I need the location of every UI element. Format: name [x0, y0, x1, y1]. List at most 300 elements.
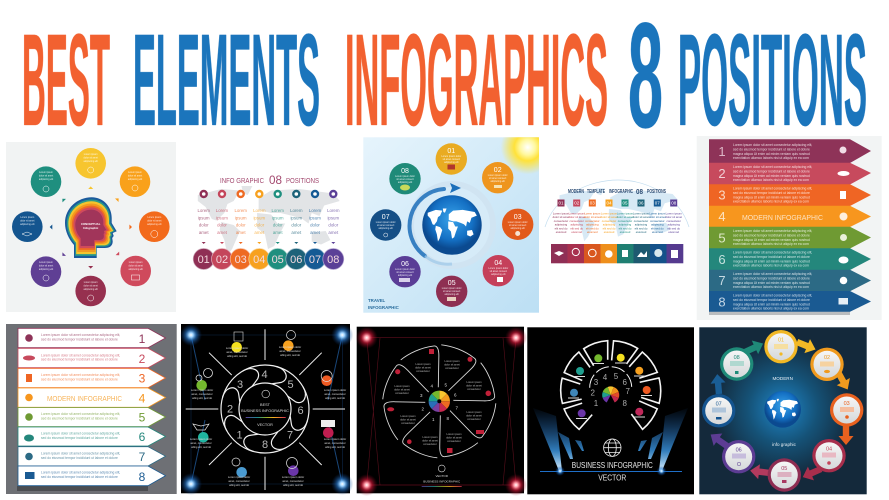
circle 01: Lorem ipsum dolor: [441, 155, 461, 158]
colored dots with icons and captions: Lorem ipsum dolor: [191, 388, 213, 392]
colored dots with icons and captions: [190, 330, 346, 487]
center label: BEST: [260, 403, 271, 407]
colored dots with icons and captions: uding elit, sed do: [227, 354, 248, 358]
world map backdrop: [198, 186, 340, 255]
text columns: dolor sit amet: [553, 215, 570, 219]
text columns: dolor: [236, 223, 246, 228]
text columns: eiusmod: [571, 230, 582, 234]
petal captions: Lorem ipsum: [444, 359, 460, 363]
head graphic: CONCEPTUAL: [81, 222, 101, 226]
circle 05: [436, 276, 467, 307]
text columns: dolor: [217, 223, 227, 228]
step 02: 02: [824, 355, 830, 361]
arrow 8: 8: [139, 470, 146, 484]
numbered squares: 08: [671, 201, 677, 206]
arrow 2: exercitation ullamco laboris nisi ut aliquip ex ea com: [733, 178, 809, 182]
arrow 6: Lorem ipsum dolor sit amet consectetur adipiscing elit,: [733, 250, 812, 254]
title: ELEMENTS: [133, 6, 320, 153]
arrow 1: Lorem ipsum dolor sit amet consectetur adipiscing elit,: [41, 333, 120, 337]
circle 05: sit amet consect: [443, 290, 461, 293]
ring numbers: 1: [236, 430, 243, 442]
colored dots with icons and captions: Lorem ipsum dolor: [226, 346, 248, 350]
arrow 6: magna aliqua Ut enim ad minim veniam quis nostrud: [733, 259, 810, 263]
arrow 7: exercitation ullamco laboris nisi ut aliquip ex ea com: [733, 285, 809, 289]
arch segments: [555, 334, 667, 432]
circle 3 deep orange: Lorem ipsum: [147, 216, 161, 219]
arrow 7: 7: [718, 273, 726, 288]
center labels: info graphic: [772, 442, 797, 447]
text columns: ipsum: [253, 215, 265, 220]
petals: [370, 332, 509, 471]
circle 7 blue: [12, 211, 43, 242]
numbered circles: 05: [272, 254, 284, 266]
circle 2 orange: Lorem ipsum: [128, 171, 142, 174]
numbered circles: [193, 248, 344, 270]
petal numbers: 5: [444, 382, 447, 388]
arrow 3: sed do eiusmod tempor incididunt ut labore et dolore: [41, 377, 118, 381]
step 01: 01: [778, 338, 784, 344]
text columns: elit sed do: [667, 226, 681, 230]
text columns: amet: [254, 230, 265, 235]
arch numbers: 6: [622, 378, 627, 387]
text columns: dolor sit amet: [633, 215, 650, 219]
petal captions: consectetur: [447, 439, 461, 443]
arrow 6: exercitation ullamco laboris nisi ut aliquip ex ea com: [733, 264, 809, 268]
text columns: eiusmod: [604, 230, 615, 234]
center labels: [772, 376, 797, 447]
text columns: Lorem: [271, 208, 284, 213]
text columns: ipsum: [216, 215, 228, 220]
text columns: Lorem ipsum: [553, 212, 570, 216]
arrow 1: magna aliqua Ut enim ad minim veniam quis nostrud: [733, 152, 810, 156]
text columns: consectetur: [634, 219, 648, 223]
numbered circles: 06: [290, 254, 302, 266]
circle 02: [482, 162, 513, 193]
petal captions: dolor sit amet: [466, 414, 482, 418]
colored dots with icons and captions: amet, consectetur: [279, 349, 301, 353]
circle 2 orange: adipiscing elit: [128, 178, 143, 181]
petal numbers: 2: [421, 406, 424, 412]
double ring with curls: [221, 365, 309, 453]
arrow 3: [709, 184, 871, 206]
panel: travel infographic: [363, 137, 539, 313]
step 05: [768, 458, 801, 492]
colored dots with icons and captions: uding elit, sed do: [325, 445, 346, 449]
text columns: consectetur: [650, 219, 665, 223]
circle 03: adipiscing elit: [511, 227, 525, 230]
circle 08: sit amet consect: [396, 178, 414, 181]
petal captions: dolor sit amet: [444, 362, 460, 366]
text columns: Lorem ipsum: [666, 212, 682, 216]
arrow 8: Lorem ipsum dolor sit amet consectetur adipiscing elit,: [41, 470, 120, 474]
colored dots with icons and captions: uding elit, sed do: [229, 483, 250, 487]
arrow 6: [18, 427, 166, 446]
numbered squares: 02: [574, 201, 580, 206]
arrow 6: 6: [718, 252, 726, 267]
arrow 3: exercitation ullamco laboris nisi ut aliquip ex ea com: [733, 200, 809, 204]
text columns: Lorem: [309, 208, 322, 213]
arrow 5: magna aliqua Ut enim ad minim veniam quis nostrud: [733, 238, 810, 242]
arrow 3: Lorem ipsum dolor sit amet consectetur adipiscing elit,: [41, 373, 120, 377]
ring numbers: 7: [287, 430, 293, 442]
circle 3 deep orange: dolor sit amet: [147, 220, 162, 222]
colored dots with icons and captions: Lorem ipsum dolor: [324, 388, 346, 392]
arrow 7: Lorem ipsum dolor sit amet consectetur adipiscing elit,: [733, 272, 812, 276]
text columns: amet: [236, 230, 246, 235]
arrow 3: 3: [139, 372, 146, 386]
numbered circles: 02: [216, 254, 228, 266]
ring numbers: 2: [227, 404, 233, 416]
petal captions: consectetur: [395, 391, 409, 395]
head graphic: [65, 197, 117, 258]
circle 04: [483, 255, 514, 286]
petal numbers: 3: [420, 393, 423, 398]
arrow 5: Lorem ipsum dolor sit amet consectetur adipiscing elit,: [733, 229, 812, 233]
arrow 8: sed do eiusmod tempor incididunt ut labore et dolore: [41, 475, 118, 479]
step 08: [720, 347, 753, 381]
text columns: adipiscing: [635, 223, 648, 227]
text columns: elit sed do: [570, 226, 584, 230]
arch numbers: 8: [622, 399, 627, 408]
circle 08: [389, 163, 421, 194]
text columns: elit sed do: [555, 226, 568, 230]
text columns: Lorem ipsum: [569, 212, 585, 216]
text columns: Lorem: [327, 208, 340, 213]
circle 1 yellow: Lorem ipsum: [84, 153, 98, 156]
circle 01: 01: [447, 148, 455, 155]
halo and swoosh arc: [410, 184, 493, 266]
colored dots with icons and captions: amet, consectetur: [324, 392, 346, 396]
numbered circles: 04: [253, 254, 265, 266]
arrow 5: exercitation ullamco laboris nisi ut aliquip ex ea com: [733, 242, 809, 246]
text columns: adipiscing: [667, 223, 680, 227]
spokes: [186, 329, 345, 490]
icon row: [200, 190, 337, 198]
arrow 2: Lorem ipsum dolor sit amet consectetur adipiscing elit,: [41, 353, 120, 357]
text columns: dolor sit amet: [568, 215, 585, 219]
ring numbers: 6: [297, 405, 304, 417]
text columns: ipsum: [309, 215, 321, 220]
arrow 4: 4: [139, 392, 146, 406]
text columns: Lorem: [234, 208, 247, 213]
petal numbers: 1: [432, 417, 435, 422]
text columns: consectetur: [618, 219, 632, 223]
colored dots with icons and captions: uding elit, sed do: [192, 396, 213, 400]
arch and map: [545, 180, 689, 241]
colored dots with icons and captions: uding elit, sed do: [283, 483, 304, 487]
text columns: eiusmod: [652, 230, 663, 234]
circle 7 blue: adipiscing elit: [20, 223, 35, 226]
globe: [422, 195, 482, 255]
travel label: [368, 298, 400, 310]
arrow 4: MODERN INFOGRAPHIC: [742, 213, 824, 222]
text columns: Lorem: [216, 208, 229, 213]
arrow 1: Lorem ipsum dolor sit amet consectetur adipiscing elit,: [733, 143, 812, 147]
arrow 3: Lorem ipsum dolor sit amet consectetur adipiscing elit,: [733, 186, 812, 190]
colored dots with captions: [568, 354, 652, 419]
petal captions: Lorem ipsum: [466, 380, 482, 384]
text columns: dolor sit amet: [617, 215, 634, 219]
arch numbers: 7: [625, 387, 630, 396]
petal numbers: 7: [455, 406, 458, 410]
circle 5 maroon: adipiscing elit: [84, 288, 98, 291]
text columns: consectetur: [569, 219, 584, 223]
arrow 2: sed do eiusmod tempor incididunt ut labore et dolore: [733, 169, 810, 173]
arrow 5: 5: [718, 230, 726, 246]
arrow 7: magna aliqua Ut enim ad minim veniam quis nostrud: [733, 281, 810, 285]
circle 7 blue: Lorem ipsum: [20, 216, 34, 219]
circle 7 blue: dolor sit amet: [20, 220, 35, 222]
arrow 5: 5: [139, 410, 146, 424]
circle 06: Lorem ipsum dolor: [395, 268, 415, 271]
ring numbers: 8: [262, 439, 268, 451]
circle 1 yellow: dolor sit amet: [84, 156, 98, 160]
bottom label: BUSINESS INFOGRAPHIC: [423, 480, 461, 484]
arrow 8: Lorem ipsum dolor sit amet consectetur adipiscing elit,: [733, 294, 812, 298]
text columns: Lorem ipsum: [633, 212, 650, 216]
color wheel: [429, 391, 450, 412]
text columns: Lorem: [197, 208, 210, 213]
bottom label: [422, 465, 462, 487]
text columns: adipiscing: [603, 223, 616, 227]
circle 01: [436, 143, 467, 175]
arrow 7: sed do eiusmod tempor incididunt ut labore et dolore: [41, 456, 118, 460]
text columns: consectetur: [666, 219, 681, 223]
arrow 7: Lorem ipsum dolor sit amet consectetur adipiscing elit,: [41, 452, 120, 456]
text columns: amet: [291, 230, 302, 235]
arch numbers: 2: [590, 388, 595, 398]
text columns: amet: [199, 230, 209, 235]
circle 04: 04: [494, 260, 502, 267]
text columns: Lorem ipsum: [584, 212, 601, 216]
panel heading: TEMPLATE: [587, 189, 605, 195]
circle 2 orange: [120, 166, 150, 197]
numbered squares: 06: [638, 201, 644, 206]
arrow 3: 3: [718, 188, 726, 202]
petal numbers: 6: [454, 392, 457, 398]
text columns: elit sed do: [586, 226, 599, 230]
circle 1 yellow: adipiscing elit: [84, 160, 98, 163]
circle 07: [370, 209, 401, 241]
circle 08: 08: [401, 168, 409, 175]
arrow 2: 2: [718, 166, 726, 181]
panel heading: MODERN: [568, 189, 584, 195]
center label: VECTOR: [257, 423, 273, 427]
ring numbers: 4: [261, 369, 268, 381]
text columns: elit sed do: [651, 226, 664, 230]
circle 02: adipiscing elit: [491, 180, 505, 183]
text columns: Lorem ipsum: [601, 212, 618, 216]
text columns: amet: [273, 230, 283, 235]
petal captions: dolor sit amet: [400, 418, 416, 422]
step 04: 04: [826, 446, 832, 452]
text columns: amet: [310, 230, 321, 235]
arrow 1: [18, 328, 166, 348]
step 07: 07: [716, 402, 722, 408]
arrow 7: [709, 270, 871, 291]
center labels: MODERN: [772, 376, 793, 381]
text columns: adipiscing: [619, 223, 632, 227]
arrow 8: [709, 291, 871, 312]
arrow 5: [709, 227, 871, 248]
circle 06: adipiscing elit: [398, 274, 413, 277]
arrow 8: [18, 466, 166, 486]
circle 05: 05: [448, 280, 456, 287]
ring numbers: [227, 369, 304, 451]
circle 6 purple: adipiscing elit: [39, 268, 54, 271]
arrow 2: [709, 163, 871, 184]
arrow 7: 7: [139, 450, 146, 464]
circle 8 teal: [31, 166, 61, 197]
text columns: Lorem ipsum: [617, 212, 634, 216]
arrow 6: sed do eiusmod tempor incididunt ut labore et dolore: [41, 436, 118, 440]
plane icon: [450, 183, 461, 193]
arrow 1: [709, 139, 871, 163]
colored dots with icons and captions: amet, consectetur: [228, 479, 250, 483]
panel heading: INFO GRAPHIC: [220, 178, 264, 185]
head graphic: Infographic: [83, 226, 99, 230]
arrow 4: MODERN INFOGRAPHIC: [47, 394, 122, 403]
text columns: dolor: [310, 223, 320, 228]
colored dots with icons and captions: amet, consectetur: [190, 441, 212, 445]
panel: black petals red flares: [356, 327, 527, 496]
arrow 8: 8: [718, 294, 726, 310]
numbered squares: 07: [655, 201, 660, 206]
text columns: [553, 212, 682, 234]
petal captions: Lorem ipsum: [446, 432, 462, 436]
red petal icons: [387, 349, 491, 453]
colored dots with icons and captions: Lorem ipsum dolor: [190, 437, 212, 441]
text columns: consectetur: [602, 219, 616, 223]
petal captions: dolor sit amet: [415, 366, 431, 370]
connector arrows: [706, 335, 854, 484]
circle 08: adipiscing elit: [398, 181, 413, 184]
arrow 4: [18, 388, 166, 407]
business infographic label: BUSINESS INFOGRAPHIC: [572, 461, 653, 470]
arrow 8: exercitation ullamco laboris nisi ut aliquip ex ea com: [733, 307, 809, 311]
circle 02: Lorem ipsum dolor: [488, 174, 508, 177]
petal numbers: 4: [430, 384, 433, 388]
panel heading: POSITIONS: [286, 178, 319, 185]
circle 3 deep orange: adipiscing elit: [147, 223, 162, 226]
arrow 6: sed do eiusmod tempor incididunt ut labore et dolore: [733, 255, 810, 259]
circle 2 orange: dolor sit amet: [128, 174, 143, 178]
circle 3 deep orange: [139, 211, 170, 242]
colored dots with icons and captions: Lorem ipsum dolor: [279, 345, 301, 349]
text columns: consectetur: [554, 219, 568, 223]
arch numbers: 4: [603, 373, 608, 382]
panel: info graphic 08 positions: [193, 173, 344, 270]
step 03: [830, 393, 863, 427]
center label: [241, 390, 289, 427]
petal captions: consectetur: [445, 366, 459, 370]
business infographic label: [572, 461, 653, 482]
text columns: dolor: [273, 223, 283, 228]
text columns: consectetur: [585, 219, 600, 223]
petal captions: [394, 359, 482, 446]
panel: head cycle: [6, 142, 176, 312]
arrow 2: 2: [139, 352, 146, 366]
numbered circles: 08: [327, 254, 339, 266]
circle 8 teal: adipiscing elit: [39, 178, 54, 181]
travel label: INFOGRAPHIC: [368, 305, 400, 310]
arrow 1: exercitation ullamco laboris nisi ut aliquip ex ea com: [733, 156, 809, 160]
panel heading: POSITIONS: [647, 189, 666, 195]
arrow 4: [709, 206, 871, 227]
circle 01: adipiscing elit: [444, 161, 459, 164]
petal captions: Lorem ipsum: [400, 414, 416, 418]
circle 4 red: dolor sit amet: [129, 264, 143, 268]
circle 8 teal: dolor sit amet: [39, 174, 54, 178]
petal captions: consectetur: [401, 421, 415, 425]
arrow 5: sed do eiusmod tempor incididunt ut labore et dolore: [733, 233, 810, 237]
step 06: 06: [736, 448, 742, 454]
text columns: Lorem: [253, 208, 266, 213]
center label: BUSINESS INFOGRAPHIC: [241, 408, 289, 413]
pointer triangles: [202, 242, 335, 244]
circle 02: 02: [494, 167, 502, 174]
panel: modern template infographic: [545, 180, 689, 263]
circle 6 purple: dolor sit amet: [39, 264, 54, 268]
small direction arrows: [50, 186, 132, 269]
arrow 4: 4: [718, 209, 726, 224]
circle 1 yellow: [75, 148, 106, 179]
circle 5 maroon: Lorem ipsum: [84, 281, 98, 284]
step 07: [702, 394, 735, 427]
colored dots with icons and captions: amet, consectetur: [226, 350, 248, 354]
circle 07: adipiscing elit: [379, 227, 393, 230]
arrow 3: sed do eiusmod tempor incididunt ut labore et dolore: [733, 191, 810, 195]
text columns: adipiscing: [651, 223, 664, 227]
text columns: dolor sit amet: [584, 215, 601, 219]
text columns: adipiscing: [586, 223, 599, 227]
red corner flares: [356, 327, 527, 496]
colored dots with icons and captions: uding elit, sed do: [280, 353, 301, 357]
arch numbers: 1: [594, 399, 599, 408]
ring numbers: 5: [287, 379, 294, 391]
arch numbers: [590, 372, 630, 408]
text columns: ipsum: [198, 215, 210, 220]
arrow 2: Lorem ipsum dolor sit amet consectetur adipiscing elit,: [733, 165, 812, 169]
petal captions: Lorem ipsum: [466, 410, 482, 414]
text columns: ipsum: [327, 215, 339, 220]
text columns: ipsum: [290, 215, 302, 220]
circle 06: [389, 256, 421, 287]
circle 05: Lorem ipsum dolor: [442, 287, 462, 290]
panel heading: 08: [269, 173, 282, 187]
arrow 5: Lorem ipsum dolor sit amet consectetur adipiscing elit,: [41, 412, 120, 416]
petal captions: dolor sit amet: [446, 436, 462, 440]
blue spotlight beams: [533, 408, 688, 476]
circle 6 purple: [31, 256, 61, 287]
arch numbers: 5: [614, 372, 619, 381]
step 04: [812, 439, 846, 472]
circle 06: 06: [401, 261, 409, 268]
circle 04: adipiscing elit: [491, 273, 506, 276]
arrow 3: magna aliqua Ut enim ad minim veniam quis nostrud: [733, 195, 810, 199]
circle 01: sit amet consect: [443, 158, 460, 161]
text columns: Lorem: [290, 208, 303, 213]
colored dots with icons and captions: amet, consectetur: [191, 392, 213, 396]
circle 07: Lorem ipsum dolor: [376, 221, 396, 224]
text columns: dolor sit amet: [601, 215, 618, 219]
text columns: ipsum: [272, 215, 284, 220]
arrow 3: [18, 368, 166, 388]
business infographic label: VECTOR: [598, 474, 626, 482]
numbered circles: 03: [235, 254, 247, 266]
petal numbers: 8: [446, 416, 449, 421]
circle 4 red: adipiscing elit: [129, 268, 143, 271]
